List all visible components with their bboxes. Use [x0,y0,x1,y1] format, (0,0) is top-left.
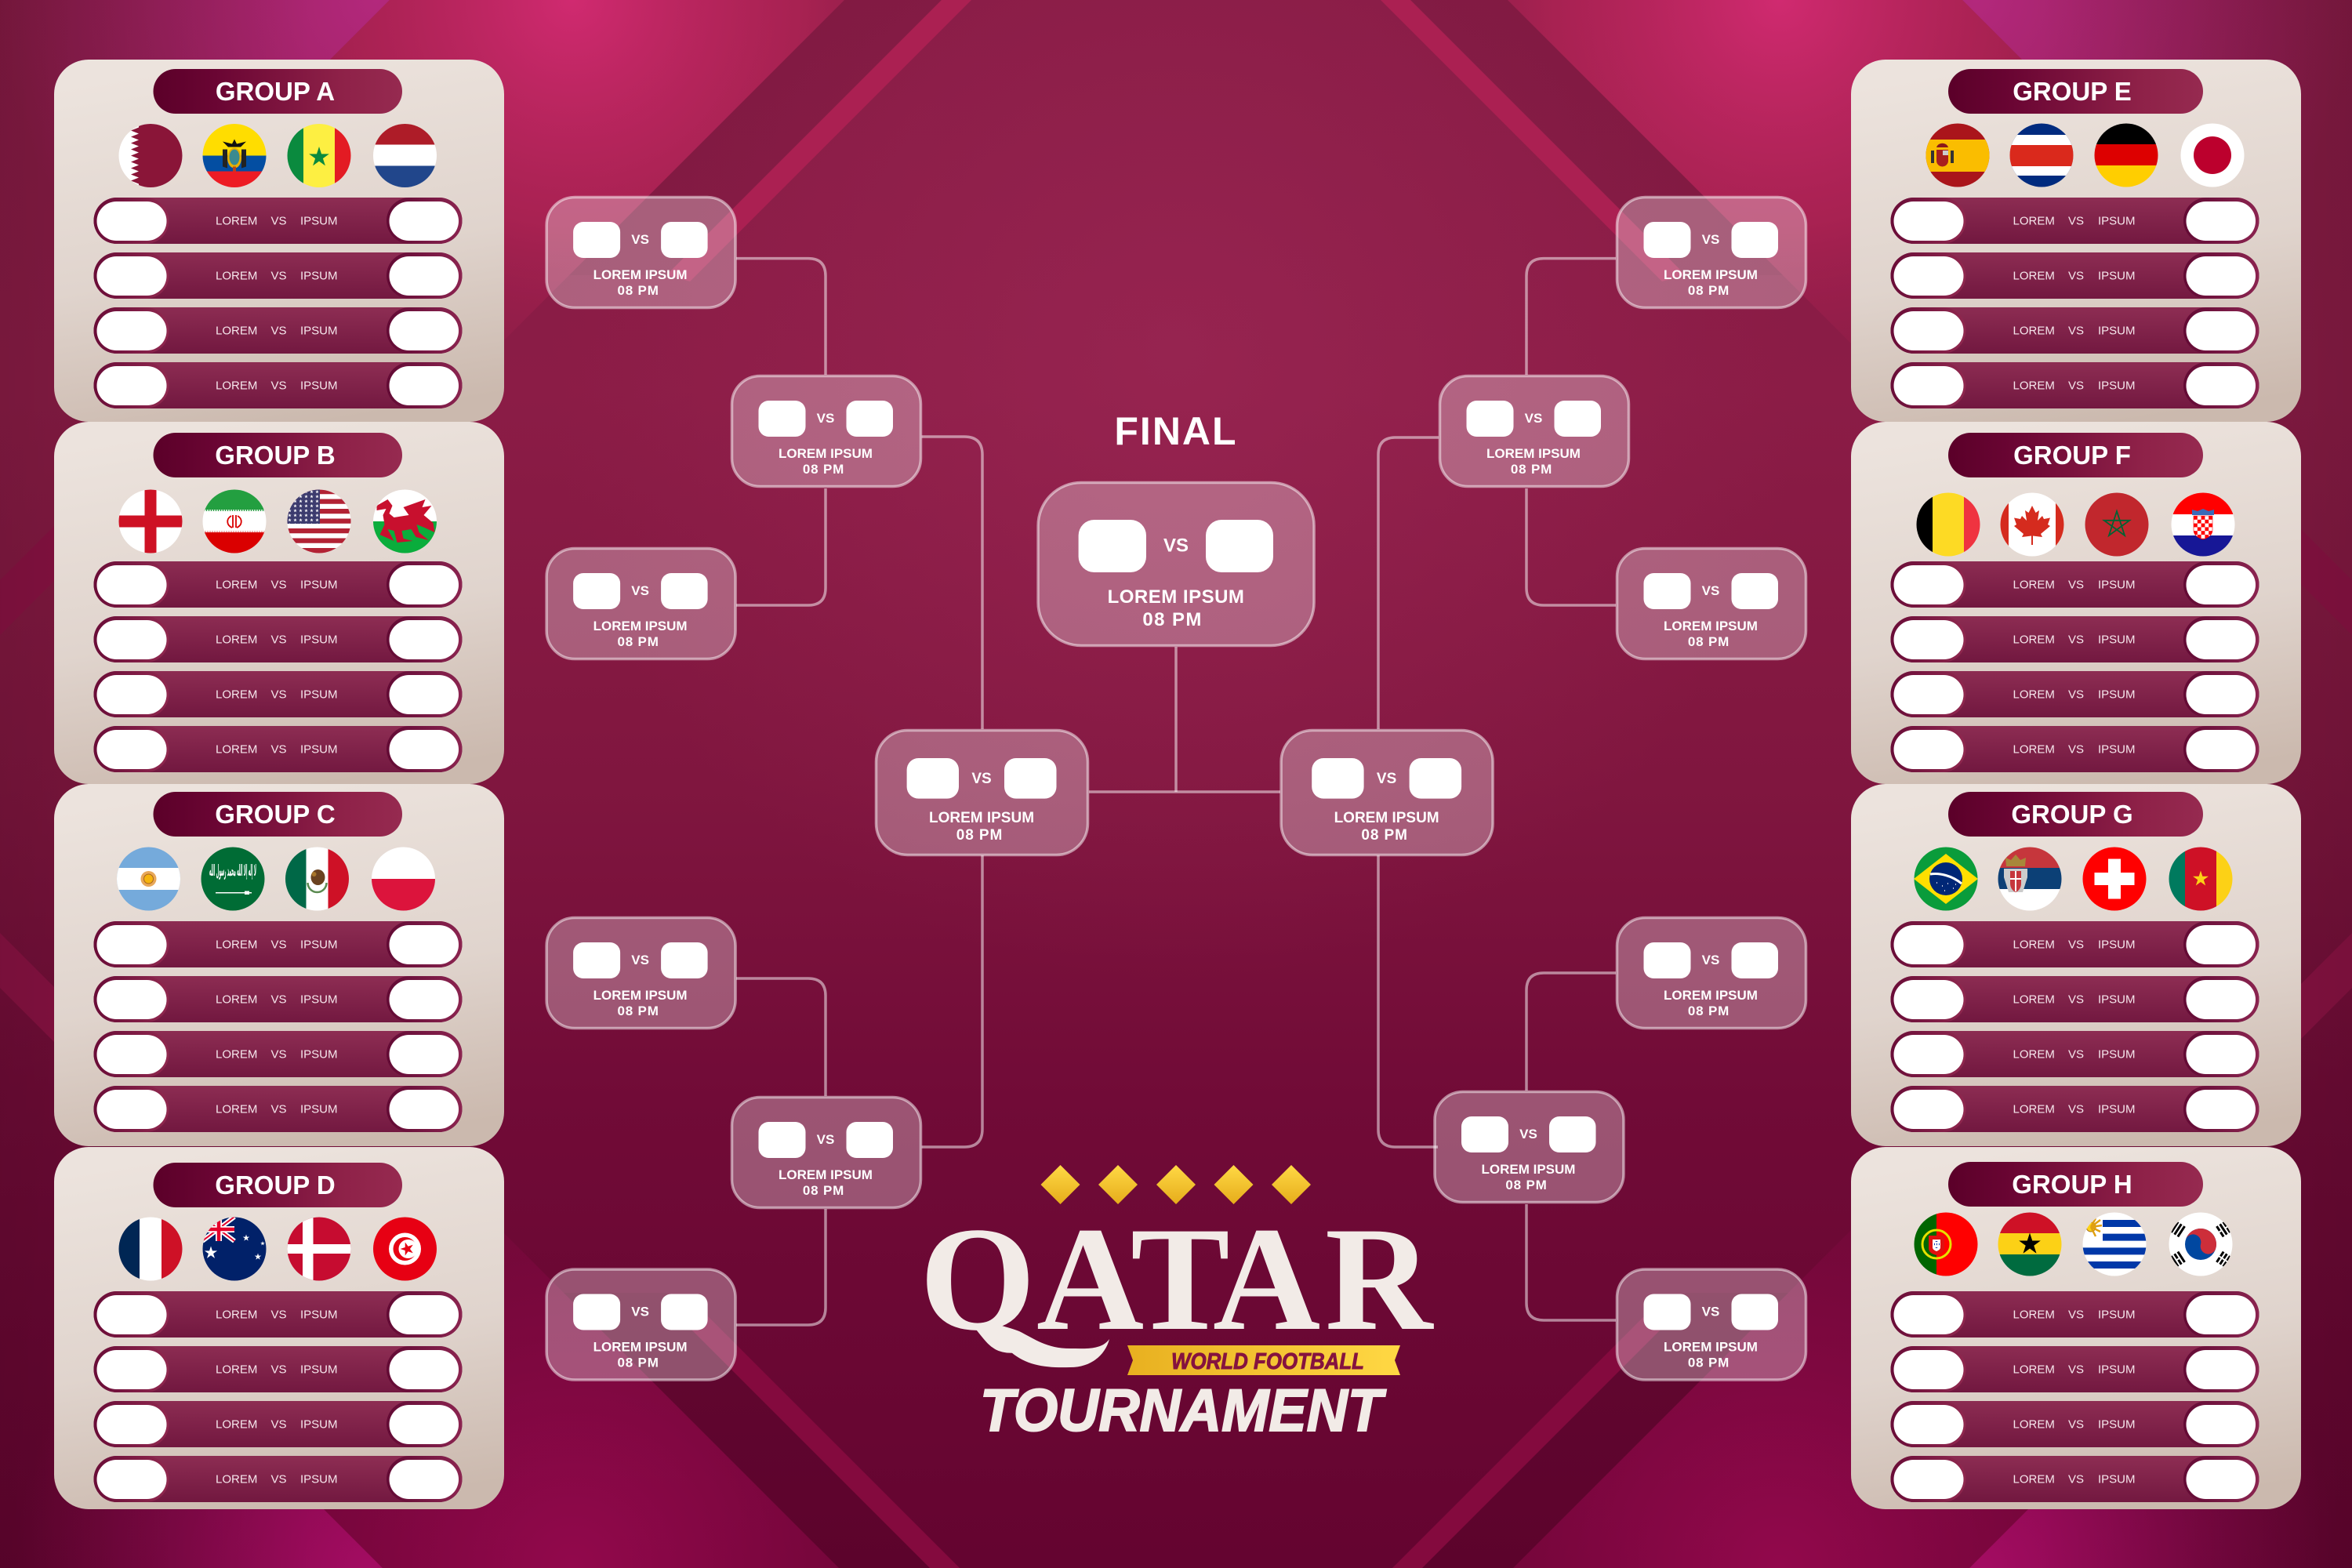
match row: VS [271,1417,287,1432]
heading: group E: GROUP E [2013,77,2132,106]
match row: IPSUM [300,993,338,1007]
match row [94,1456,463,1502]
match row: IPSUM [2098,1047,2136,1062]
match row: LOREM [2013,1363,2055,1377]
match row: VS [2068,1417,2084,1432]
match card: round of 16, left 3 [546,917,735,1029]
match row [94,921,463,967]
match row: LOREM [2013,1417,2055,1432]
heading: group G: GROUP G [2011,800,2133,829]
match row: LOREM [216,938,257,952]
match card: round of 16, left 1: 08 PM [618,283,659,298]
panel: group A [54,60,504,422]
match row: LOREM [216,743,257,756]
match card: round of 16, right 2: VS [1702,583,1719,598]
match row: LOREM [216,1047,257,1062]
icon: flag of Australia [202,1217,267,1281]
match row: IPSUM [2098,579,2136,591]
match row: IPSUM [2098,1102,2136,1116]
heading: group B [154,433,402,477]
match row: VS [271,633,287,646]
match row: VS [271,270,287,282]
match row: IPSUM [300,1047,338,1062]
match row: VS [271,993,287,1007]
icon: flag of Spain [1926,123,1990,187]
match row [94,561,463,608]
match row [1891,307,2259,354]
match row: IPSUM [2098,1472,2136,1486]
match row: LOREM [2013,215,2055,227]
icon: flag of Poland [372,847,436,911]
match card: quarter-final, left bottom: VS [817,1132,834,1147]
match row: VS [2068,325,2084,337]
wordmark: tournament: TOURNAMENT [980,1377,1386,1444]
match card: round of 16, left 4 [546,1269,735,1380]
match row [1891,726,2259,772]
match card: round of 16, right 1: LOREM IPSUM [1664,267,1758,282]
heading: group H: GROUP H [2012,1170,2132,1199]
match row: IPSUM [300,270,338,282]
match card: round of 16, right 3 [1617,917,1806,1029]
match row: IPSUM [2098,633,2136,646]
match card: round of 16, right 3: LOREM IPSUM [1664,988,1758,1003]
match card: round of 16, left 4: VS [631,1305,649,1319]
icon: flag of Saudi Arabia [201,847,265,911]
match card: round of 16, right 3: VS [1702,953,1719,967]
match card: semi-final right: LOREM IPSUM [1334,810,1439,826]
match row [1891,1456,2259,1502]
match row: LOREM [216,1472,257,1486]
logo: Qatar World Football Tournament [920,1165,1434,1444]
icon: flag of Denmark [287,1217,351,1281]
panel: group H [1851,1147,2301,1509]
heading: final: FINAL [1114,409,1238,453]
match row [94,1031,463,1077]
match row: IPSUM [300,688,338,701]
panel: group B [54,422,504,784]
match card: final: 08 PM [1142,609,1203,630]
icon: flag of Costa Rica [2009,123,2074,187]
match row: IPSUM [300,1308,338,1322]
match card: round of 16, left 2: VS [631,583,649,598]
match row [1891,561,2259,608]
match card: semi-final right: 08 PM [1361,827,1408,844]
heading: group F: GROUP F [2013,441,2131,470]
match row: IPSUM [300,379,338,392]
match row [94,671,463,717]
match card: quarter-final, left bottom: 08 PM [803,1183,844,1198]
panel: group F [1851,422,2301,784]
match row: VS [2068,1363,2084,1377]
match card: final [1038,483,1314,646]
icon: flag of Canada [2000,492,2064,557]
match row: VS [2068,688,2084,701]
match row: VS [271,1472,287,1486]
match card: semi-final left [877,731,1088,855]
match row [94,1401,463,1447]
flags: group E [1926,123,2245,187]
match card: round of 16, right 4 [1617,1269,1806,1380]
panel: group D [54,1147,504,1509]
match row: IPSUM [300,938,338,952]
match row: LOREM [2013,1308,2055,1322]
match row [1891,1086,2259,1132]
match row: IPSUM [300,1472,338,1486]
match card: semi-final right [1281,731,1493,855]
match card: semi-final left: VS [971,771,992,787]
icon: flag of Ecuador [202,124,267,188]
icon: flag of Brazil [1914,847,1978,911]
match card: round of 16, left 4: LOREM IPSUM [593,1339,688,1355]
match row: IPSUM [2098,993,2136,1007]
match row [1891,671,2259,717]
match card: quarter-final, left bottom [732,1098,920,1207]
match card: quarter-final, right bottom: 08 PM [1505,1178,1548,1192]
heading: group A: GROUP A [216,77,335,106]
match row: LOREM [2013,1102,2055,1116]
match card: round of 16, left 2: LOREM IPSUM [593,619,688,633]
match row: LOREM [216,325,257,337]
match row: VS [2068,579,2084,591]
flags: group A [118,124,437,188]
match row: LOREM [2013,325,2055,337]
match row: LOREM [216,1102,257,1116]
match card: round of 16, left 3: VS [631,953,649,967]
icon: flag of Germany [2094,123,2158,187]
icon: flag of South Korea [2169,1212,2233,1276]
icon: flag of Switzerland [2082,847,2147,911]
match row [1891,362,2259,408]
match card: quarter-final, left top: VS [817,411,834,426]
icon: flag of Wales [373,489,437,554]
match row: VS [271,379,287,392]
match row: LOREM [216,270,257,282]
match card: round of 16, right 1: VS [1702,232,1719,247]
match row: IPSUM [300,325,338,337]
match row: VS [271,938,287,952]
match row: VS [2068,379,2084,392]
match row [1891,198,2259,244]
match row: VS [271,688,287,701]
match row: VS [2068,1102,2084,1116]
match card: quarter-final, right top: LOREM IPSUM [1486,446,1581,461]
icon: flag of Qatar [118,124,183,188]
match card: quarter-final, right bottom [1435,1091,1624,1203]
match row: VS [2068,1472,2084,1486]
match row [94,198,463,244]
match row: IPSUM [2098,938,2136,952]
match row: VS [2068,215,2084,227]
icon: flag of Uruguay [2082,1212,2147,1276]
match card: round of 16, right 2: 08 PM [1688,634,1730,649]
match row: IPSUM [2098,1308,2136,1322]
match card: final: LOREM IPSUM [1108,586,1244,608]
heading: group C: GROUP C [215,800,336,829]
match card: round of 16, right 4: 08 PM [1688,1355,1730,1370]
icon: flag of Netherlands [373,124,437,188]
match row [94,362,463,408]
match row [94,1086,463,1132]
heading: group H [1948,1162,2203,1207]
icon: flag of Senegal [287,124,351,188]
match row: LOREM [2013,270,2055,282]
match row [94,307,463,354]
flags: group F [1916,492,2235,557]
match row: VS [2068,1308,2084,1322]
match row: VS [2068,743,2084,756]
match row [1891,1401,2259,1447]
match row: VS [271,325,287,337]
match row: LOREM [2013,379,2055,392]
ribbon: world football [1127,1345,1400,1375]
match card: round of 16, left 3: 08 PM [618,1004,659,1018]
icon: flag of Japan [2180,123,2245,187]
match row [1891,616,2259,662]
match row: IPSUM [300,215,338,227]
flags: group G [1914,847,2233,911]
match card: round of 16, left 4: 08 PM [618,1355,659,1370]
match row: VS [271,743,287,756]
match row [1891,976,2259,1022]
flags: group B [118,489,437,554]
match row: VS [271,1047,287,1062]
match card: quarter-final, right top: 08 PM [1511,462,1552,477]
match row: IPSUM [300,1417,338,1432]
match card: round of 16, right 4: LOREM IPSUM [1664,1339,1758,1355]
match row: IPSUM [300,743,338,756]
match row: IPSUM [2098,215,2136,227]
heading: group D: GROUP D [215,1171,336,1200]
icon: flag of England [118,489,183,554]
match row: VS [2068,270,2084,282]
match row: LOREM [2013,938,2055,952]
match card: final: VS [1163,535,1189,557]
match row: LOREM [216,688,257,701]
match row: LOREM [216,1363,257,1377]
match row: VS [2068,993,2084,1007]
match row [1891,1031,2259,1077]
match card: round of 16, right 2: LOREM IPSUM [1664,619,1758,633]
decorative gold diamonds [1041,1165,1311,1204]
match row: LOREM [2013,1047,2055,1062]
match row: LOREM [2013,743,2055,756]
match card: round of 16, left 1: VS [631,232,649,247]
match row [94,726,463,772]
match row: VS [2068,633,2084,646]
heading: group A [154,69,402,114]
wordmark: QATAR: QATAR [920,1197,1434,1362]
match row: IPSUM [2098,270,2136,282]
flags: group H [1914,1212,2233,1276]
flags: group C [116,847,436,911]
match row: LOREM [2013,579,2055,591]
match row: LOREM [2013,633,2055,646]
match row [94,976,463,1022]
match row: IPSUM [2098,325,2136,337]
match card: round of 16, right 3: 08 PM [1688,1004,1730,1018]
match row: VS [271,1363,287,1377]
match row [1891,252,2259,299]
match card: round of 16, right 4: VS [1702,1305,1719,1319]
match card: quarter-final, left top [732,376,920,486]
match row: LOREM [216,633,257,646]
heading: group F [1948,433,2203,477]
match card: round of 16, left 3: LOREM IPSUM [593,988,688,1003]
match row [94,616,463,662]
match card: round of 16, left 2 [546,549,735,659]
icon: flag of Iran [202,489,267,554]
match row [1891,921,2259,967]
bracket connectors [736,259,1616,1325]
match row: IPSUM [300,1363,338,1377]
match row: VS [2068,1047,2084,1062]
match card: round of 16, right 2 [1617,549,1806,659]
match row: IPSUM [2098,688,2136,701]
match card: quarter-final, left top: 08 PM [803,462,844,477]
icon: flag of USA [287,489,351,554]
match card: semi-final right: VS [1377,771,1396,787]
match card: round of 16, left 2: 08 PM [618,634,659,649]
match card: quarter-final, right top: VS [1525,411,1542,426]
match row [94,1291,463,1338]
match card: quarter-final, right bottom: VS [1519,1127,1537,1142]
heading: group G [1948,792,2203,837]
heading: group E [1948,69,2203,114]
panel: group G [1851,784,2301,1146]
icon: flag of Belgium [1916,492,1980,557]
icon: flag of Portugal [1914,1212,1978,1276]
flags: group D [118,1217,437,1281]
match row [1891,1291,2259,1338]
flags: group C: لا إله إلا الله محمد رسول الله [209,861,256,880]
match row: IPSUM [2098,743,2136,756]
heading: group B: GROUP B [215,441,336,470]
match card: round of 16, left 1 [546,198,735,307]
match row: VS [271,579,287,591]
match row [94,1346,463,1392]
match row: LOREM [216,993,257,1007]
match row: VS [271,1308,287,1322]
match row: LOREM [2013,993,2055,1007]
icon: flag of Croatia [2171,492,2235,557]
match row: LOREM [216,215,257,227]
match row: LOREM [2013,688,2055,701]
icon: flag of Serbia [1998,847,2062,911]
heading: group D [154,1163,402,1207]
panel: group E [1851,60,2301,422]
match card: round of 16, left 1: LOREM IPSUM [593,267,688,282]
match card: quarter-final, left top: LOREM IPSUM [779,446,873,461]
match row: LOREM [216,1308,257,1322]
match card: round of 16, right 1 [1617,198,1806,307]
match row: IPSUM [300,579,338,591]
match row: IPSUM [2098,1417,2136,1432]
icon: flag of Mexico [285,847,350,911]
match card: quarter-final, left bottom: LOREM IPSUM [779,1167,873,1182]
icon: flag of Tunisia [373,1217,437,1281]
match row: VS [2068,938,2084,952]
match card: semi-final left: LOREM IPSUM [929,810,1034,826]
match row: IPSUM [300,1102,338,1116]
match card: round of 16, right 1: 08 PM [1688,283,1730,298]
ribbon: world football: WORLD FOOTBALL [1171,1349,1364,1374]
match card: quarter-final, right top [1439,376,1629,486]
icon: flag of France [118,1217,183,1281]
match row: LOREM [2013,1472,2055,1486]
match row: IPSUM [2098,379,2136,392]
match row: IPSUM [2098,1363,2136,1377]
icon: flag of Ghana [1998,1212,2062,1276]
match card: semi-final left: 08 PM [956,827,1003,844]
match row: LOREM [216,579,257,591]
match row: VS [271,1102,287,1116]
match row [1891,1346,2259,1392]
icon: flag of Argentina [116,847,180,911]
match row: VS [271,215,287,227]
heading: group C [154,792,402,837]
icon: flag of Cameroon [2169,847,2233,911]
panel: group C [54,784,504,1146]
match row [94,252,463,299]
match row: LOREM [216,379,257,392]
icon: flag of Morocco [2085,492,2149,557]
match row: LOREM [216,1417,257,1432]
match row: IPSUM [300,633,338,646]
match card: quarter-final, right bottom: LOREM IPSUM [1482,1162,1575,1177]
